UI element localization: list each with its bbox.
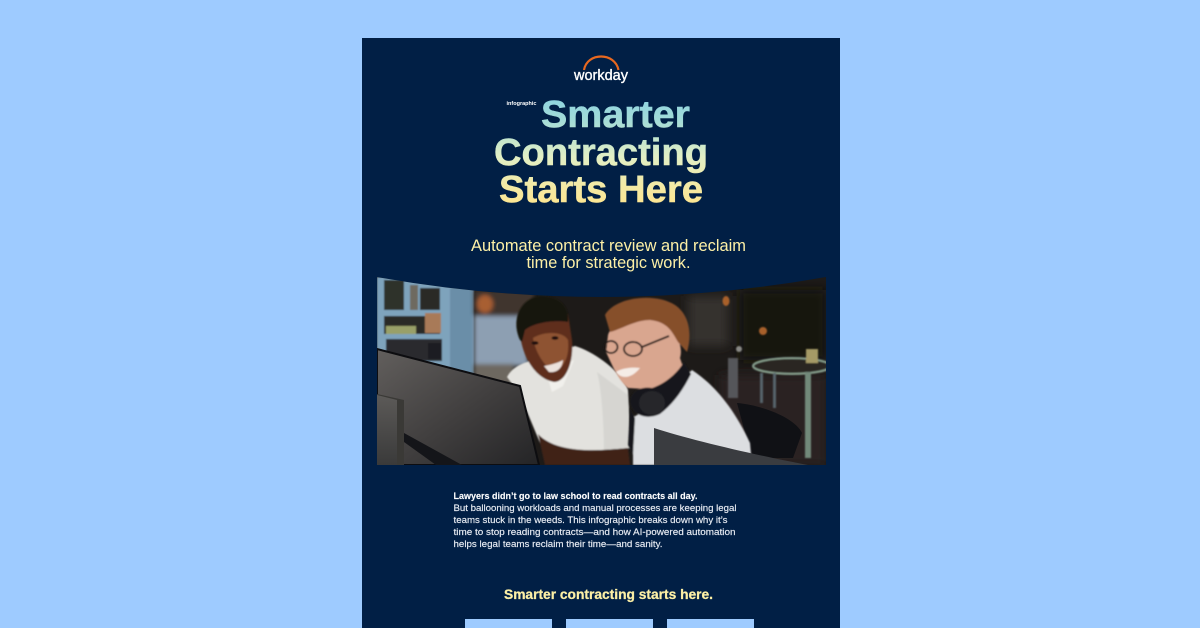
logo: workday (573, 56, 628, 84)
intro text: time to stop reading contracts—and how AI-powered automation (454, 526, 736, 537)
title: Smarter (541, 94, 690, 136)
label: infographic: infographic (506, 101, 536, 107)
monitor right (654, 428, 808, 465)
section heading: Smarter contracting starts here. (504, 587, 713, 602)
chair (737, 403, 802, 458)
title: Contracting (494, 132, 708, 174)
intro text: helps legal teams reclaim their time—and sanity. (454, 538, 662, 549)
subtitle (471, 237, 746, 272)
cards (465, 619, 754, 628)
panel: infographic cover (362, 38, 840, 628)
intro text: Lawyers didn’t go to law school to read contracts all day. (454, 490, 698, 501)
monitor large (377, 349, 539, 465)
table (753, 349, 831, 458)
subtitle: Automate contract review and reclaim (471, 237, 746, 255)
subtitle: time for strategic work. (526, 254, 690, 272)
person right (604, 298, 752, 465)
intro text: But ballooning workloads and manual processes are keeping legal (454, 502, 736, 513)
person left (507, 296, 631, 465)
logo: workday: workday (573, 67, 628, 84)
title (494, 94, 708, 211)
photo: two colleagues at monitors (377, 270, 831, 465)
intro text: teams stuck in the weeds. This infographic breaks down why it’s (454, 514, 728, 525)
intro text (454, 490, 736, 549)
title: Starts Here (499, 169, 703, 211)
photo background (377, 270, 826, 465)
